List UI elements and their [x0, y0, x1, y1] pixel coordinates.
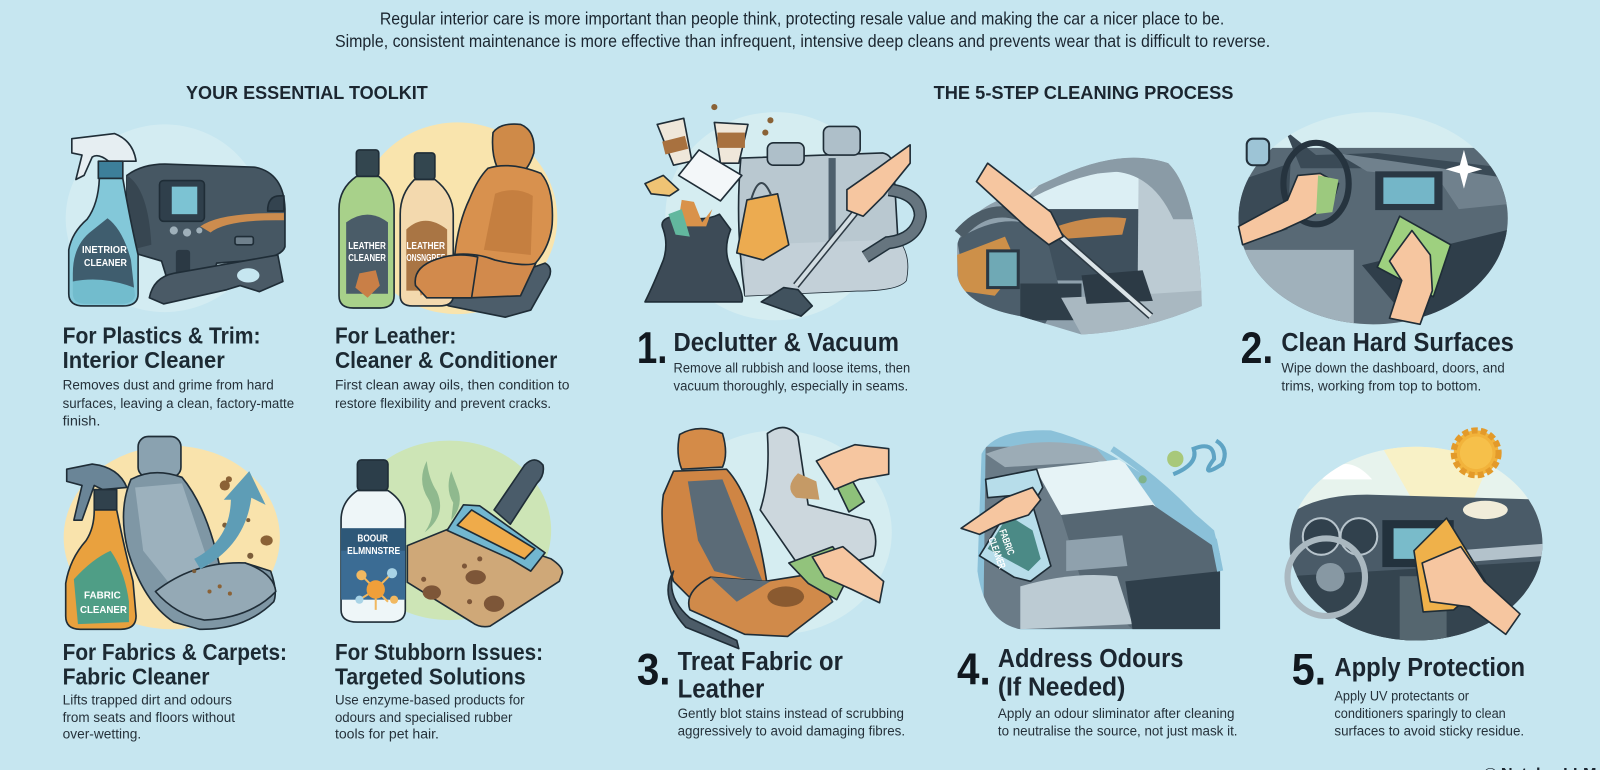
text: stubborn issues: tools for pet hair.	[335, 726, 439, 742]
illustration: address odours: CLEANER	[985, 536, 1007, 571]
text: plastics and trim: Interior Cleaner	[63, 347, 225, 373]
step text: surfaces to avoid sticky residue.	[1334, 723, 1524, 739]
panel: step 3	[637, 428, 905, 739]
text: fabric: from seats and floors without	[63, 710, 235, 726]
illustration: address odours	[961, 430, 1225, 629]
panel: step 5	[1287, 430, 1546, 739]
illustration: declutter and vacuum	[645, 104, 920, 320]
illustration: treat fabric or leather	[662, 428, 892, 649]
text: stubborn issues: odours and specialised rubber	[335, 710, 513, 726]
step text: Apply an odour sliminator after cleaning	[998, 706, 1235, 722]
text: plastics and trim	[63, 323, 294, 429]
text: plastics and trim: Removes dust and grime from hard	[63, 378, 274, 394]
icon: spray bottle and dashboard	[66, 124, 285, 312]
intro text	[335, 8, 1270, 51]
icon: fabric spray and seat: FABRIC	[84, 591, 121, 602]
heading: process: THE 5-STEP CLEANING PROCESS	[934, 82, 1233, 103]
icon: leather bottles and seat: LEATHER	[406, 241, 446, 252]
text: stubborn issues: For Stubborn Issues:	[335, 639, 543, 665]
step number 2: 2.	[1241, 322, 1273, 373]
text: stubborn issues: Targeted Solutions	[335, 663, 526, 689]
step text: Gently blot stains instead of scrubbing	[678, 706, 904, 722]
intro text: Simple, consistent maintenance is more effective than infrequent, intensive deep cleans and prevents wear that is difficult to reverse.	[335, 31, 1270, 51]
step heading: Apply Protection	[1334, 654, 1525, 682]
step text: vacuum thoroughly, especially in seams.	[674, 379, 908, 395]
text: fabric: Lifts trapped dirt and odours	[63, 693, 232, 709]
step text	[674, 360, 910, 395]
step number 5: 5.	[1292, 643, 1326, 694]
panel: stubborn issues	[335, 441, 562, 742]
icon: fabric spray and seat	[64, 437, 280, 629]
step heading: Declutter & Vacuum	[674, 329, 899, 357]
text: stubborn issues	[335, 639, 543, 742]
illustration: apply protection	[1287, 430, 1546, 643]
icon: odour eliminator and pet hair brush	[341, 441, 562, 627]
illustration: clean hard surfaces	[1234, 112, 1510, 331]
icon: spray bottle and dashboard: INETRIOR	[82, 245, 127, 256]
step text	[1334, 689, 1524, 739]
intro text: Regular interior care is more important than people think, protecting resale value and making the car a nicer place to be.	[380, 8, 1224, 28]
panel: step 1	[637, 104, 920, 395]
step heading	[998, 645, 1183, 702]
text: leather: For Leather:	[335, 323, 456, 349]
text: fabric: For Fabrics & Carpets:	[63, 639, 287, 665]
step text: to neutralise the source, not just mask it.	[998, 723, 1238, 739]
step heading: Treat Fabric or	[678, 648, 843, 676]
step number 3: 3.	[637, 643, 670, 694]
text: fabric: over-wetting.	[63, 726, 141, 742]
step text: aggressively to avoid damaging fibres.	[678, 723, 905, 739]
step text: Wipe down the dashboard, doors, and	[1281, 360, 1505, 376]
icon: leather bottles and seat: CLEANER	[348, 253, 386, 264]
step text	[998, 706, 1238, 739]
icon: spray bottle and dashboard: CLEANER	[84, 258, 127, 269]
step text: trims, working from top to bottom.	[1281, 379, 1481, 395]
text: fabric	[63, 639, 287, 742]
step heading: Address Odours	[998, 645, 1183, 673]
step number 1: 1.	[637, 322, 667, 373]
icon: leather bottles and seat: LEATHER	[348, 241, 386, 252]
step text: Remove all rubbish and loose items, then	[674, 360, 910, 376]
text: leather	[335, 323, 570, 412]
step text: conditioners sparingly to clean	[1334, 706, 1506, 722]
text: leather: First clean away oils, then condition to	[335, 378, 570, 394]
text: stubborn issues: Use enzyme-based products for	[335, 693, 525, 709]
icon: fabric spray and seat: CLEANER	[80, 605, 127, 616]
step number 4: 4.	[957, 643, 991, 694]
icon: odour eliminator and pet hair brush: ELMNNSTRE	[347, 546, 400, 557]
panel: interior cleaner	[63, 124, 294, 429]
panel: step 4	[957, 430, 1238, 739]
step heading	[678, 648, 843, 704]
illustration: vacuuming the car footwell	[954, 158, 1202, 334]
text: leather: Cleaner & Conditioner	[335, 347, 557, 373]
panel: leather	[335, 122, 570, 412]
text: plastics and trim: finish.	[63, 413, 100, 429]
icon: leather bottles and seat	[339, 122, 557, 317]
text: plastics and trim: surfaces, leaving a clean, factory-matte	[63, 396, 294, 412]
step text	[678, 706, 905, 739]
text: fabric: Fabric Cleaner	[63, 663, 209, 689]
step heading: Leather	[678, 676, 764, 704]
heading: toolkit: YOUR ESSENTIAL TOOLKIT	[186, 82, 429, 103]
text: plastics and trim: For Plastics & Trim:	[63, 323, 260, 349]
step heading: (If Needed)	[998, 674, 1125, 702]
icon: odour eliminator and pet hair brush: BOOUR	[357, 534, 388, 545]
panel: step 2	[1234, 112, 1514, 395]
step text: Apply UV protectants or	[1334, 689, 1469, 705]
illustration: address odours: FABRIC	[996, 528, 1016, 557]
step heading: Clean Hard Surfaces	[1281, 329, 1514, 357]
panel: fabric	[63, 437, 287, 742]
step text	[1281, 360, 1505, 395]
text: leather: restore flexibility and prevent cracks.	[335, 396, 551, 412]
icon: leather bottles and seat: ONSNGREF	[406, 253, 445, 264]
